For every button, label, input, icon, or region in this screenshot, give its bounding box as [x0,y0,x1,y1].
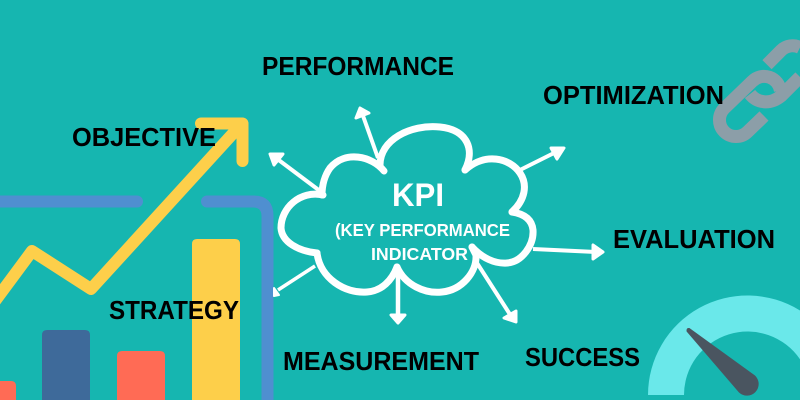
arrow: to success [477,263,516,322]
arrow: to objective [270,154,320,191]
arrow: to performance [356,108,378,158]
chart frame [0,196,274,400]
cloud title: KPI: KPI [392,177,444,213]
label: measurement: MEASUREMENT [283,346,479,376]
label: objective: OBJECTIVE [72,122,216,152]
label: success: SUCCESS [525,342,640,372]
arrows radiating from cloud [270,108,603,323]
bars [0,239,240,400]
cloud subtitle line 1: (KEY PERFORMANCE [335,220,510,240]
cloud outline [281,127,533,292]
label: performance: PERFORMANCE [262,51,454,81]
arrow: to measurement [391,266,405,323]
icon: chain link [719,46,800,137]
label: optimization: OPTIMIZATION [543,80,724,110]
gauge needle [687,328,759,396]
arrow: to evaluation [533,245,603,259]
icon: speedometer gauge [648,296,800,396]
rising arrow [0,124,242,301]
gauge arc [648,296,800,395]
label: strategy: STRATEGY [109,295,239,325]
icon: bar chart with rising arrow [0,124,274,400]
arrow: to optimization [520,148,564,170]
cloud subtitle line 2: INDICATOR [371,244,468,264]
arrow: to strategy [274,266,315,296]
label: evaluation: EVALUATION [613,224,775,254]
